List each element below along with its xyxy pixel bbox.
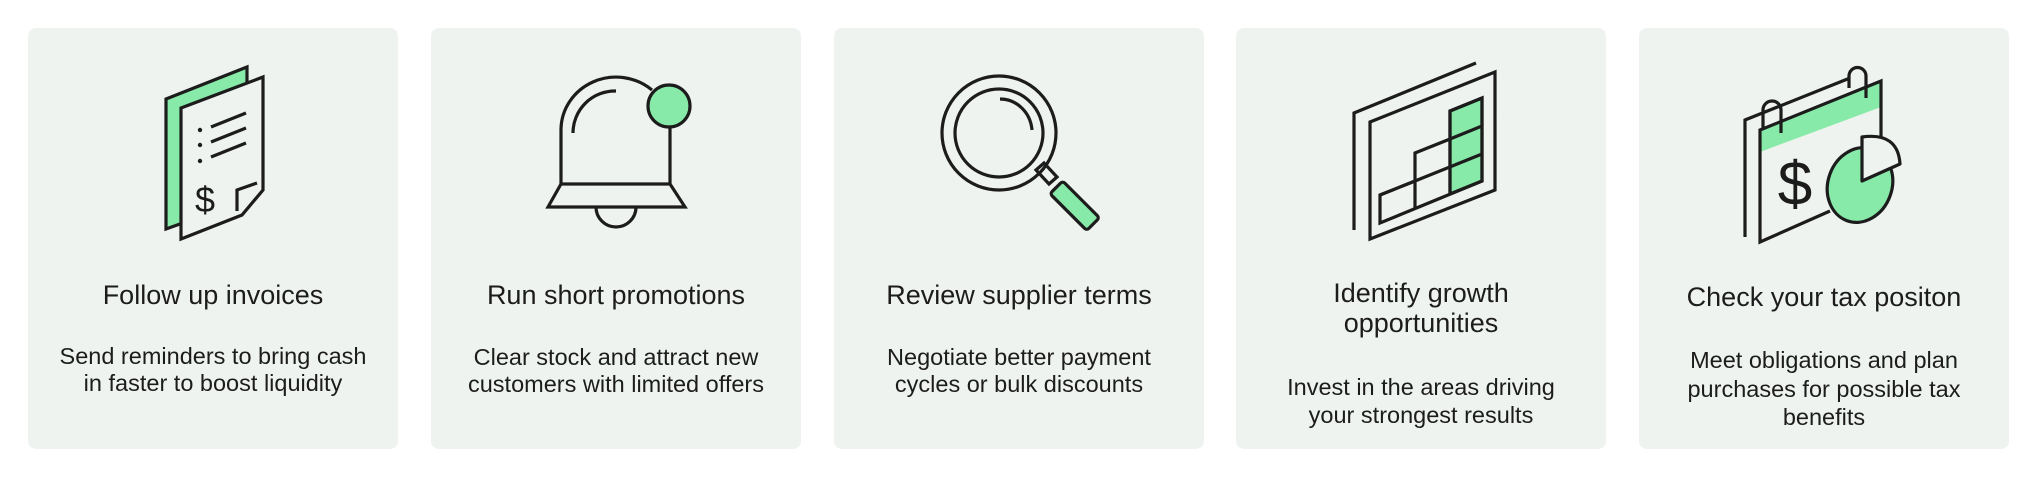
text block: purchases for possible tax bbox=[1687, 376, 1960, 402]
text block: Send reminders to bring cash bbox=[60, 343, 366, 369]
text block bbox=[468, 344, 764, 397]
text block: cycles or bulk discounts bbox=[895, 371, 1143, 397]
text block: Invest in the areas driving bbox=[1287, 374, 1555, 400]
heading: Run short promotions bbox=[487, 280, 745, 310]
text block: in faster to boost liquidity bbox=[84, 370, 342, 396]
text block: customers with limited offers bbox=[468, 371, 764, 397]
icon: bell bbox=[548, 77, 690, 227]
heading: Identify growth bbox=[1333, 278, 1509, 308]
icon: tax calendar: $ bbox=[1778, 150, 1812, 219]
icon: invoice bbox=[166, 67, 263, 239]
panel: review supplier terms bbox=[834, 28, 1204, 449]
text block: benefits bbox=[1783, 404, 1865, 430]
heading: Review supplier terms bbox=[886, 280, 1152, 310]
text block bbox=[60, 343, 366, 396]
icon: growth chart bbox=[1354, 63, 1495, 239]
heading bbox=[1333, 278, 1509, 338]
text block bbox=[1287, 374, 1555, 428]
icon: invoice: $ bbox=[195, 179, 215, 220]
heading: opportunities bbox=[1344, 308, 1498, 338]
icon: tax calendar bbox=[1745, 68, 1903, 242]
panel: run short promotions bbox=[431, 28, 801, 449]
icon: magnifier bbox=[942, 76, 1099, 230]
text block: Negotiate better payment bbox=[887, 344, 1151, 370]
text block bbox=[887, 344, 1151, 397]
panel: check your tax position bbox=[1639, 28, 2009, 449]
text block: your strongest results bbox=[1309, 402, 1533, 428]
text block: Clear stock and attract new bbox=[474, 344, 758, 370]
panel: follow up invoices bbox=[28, 28, 398, 449]
heading: Follow up invoices bbox=[103, 280, 323, 310]
text block bbox=[1687, 347, 1960, 430]
text block: Meet obligations and plan bbox=[1690, 347, 1958, 373]
panel: identify growth opportunities bbox=[1236, 28, 1606, 449]
heading: Check your tax positon bbox=[1687, 282, 1961, 312]
